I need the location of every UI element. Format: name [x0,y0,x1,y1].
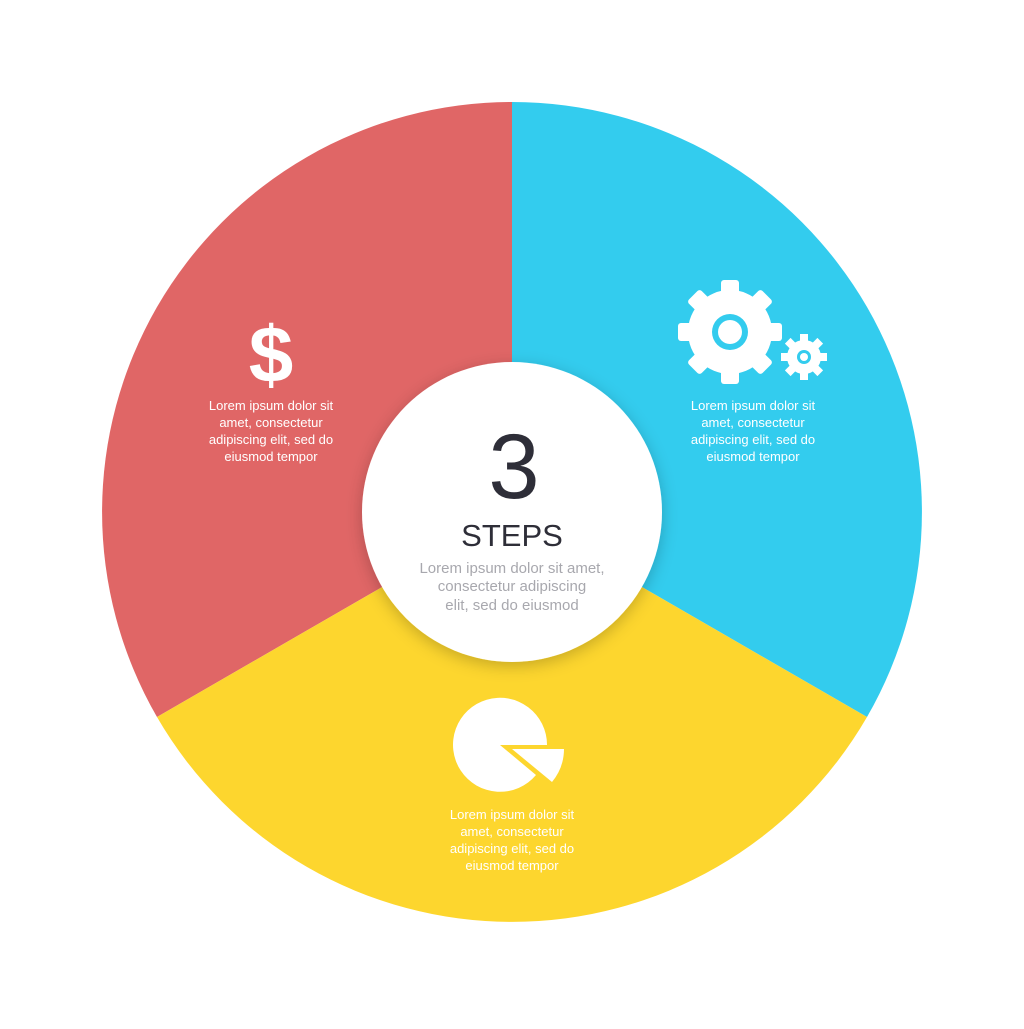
segment: blue [512,102,922,717]
icon: gears [656,258,837,406]
text: red segment: eiusmod tempor [224,449,318,464]
text: yellow segment: Lorem ipsum dolor sit [450,807,575,822]
center description: Lorem ipsum dolor sit amet, [419,560,605,577]
text: blue segment: amet, consectetur [701,415,805,430]
text: blue segment: adipiscing elit, sed do [691,432,815,447]
heading: steps: STEPS [461,518,563,553]
segment: red [102,102,512,717]
icon: dollar sign: $ [249,310,293,399]
number 3: 3 [488,416,540,518]
text: red segment: Lorem ipsum dolor sit [209,398,334,413]
text: red segment: adipiscing elit, sed do [209,432,333,447]
text: yellow segment: eiusmod tempor [465,858,559,873]
center description: consectetur adipiscing [438,578,586,595]
center description: elit, sed do eiusmod [445,597,579,614]
text: blue segment: eiusmod tempor [706,449,800,464]
text: blue segment: Lorem ipsum dolor sit [691,398,816,413]
icon: pie chart [453,698,564,792]
segment: yellow [157,512,867,922]
text: red segment: amet, consectetur [219,415,323,430]
text: yellow segment: adipiscing elit, sed do [450,841,574,856]
text: red segment [209,398,334,464]
center circle [362,362,662,662]
text: yellow segment [450,807,575,873]
center description [419,560,605,614]
text: blue segment [691,398,816,464]
text: yellow segment: amet, consectetur [460,824,564,839]
